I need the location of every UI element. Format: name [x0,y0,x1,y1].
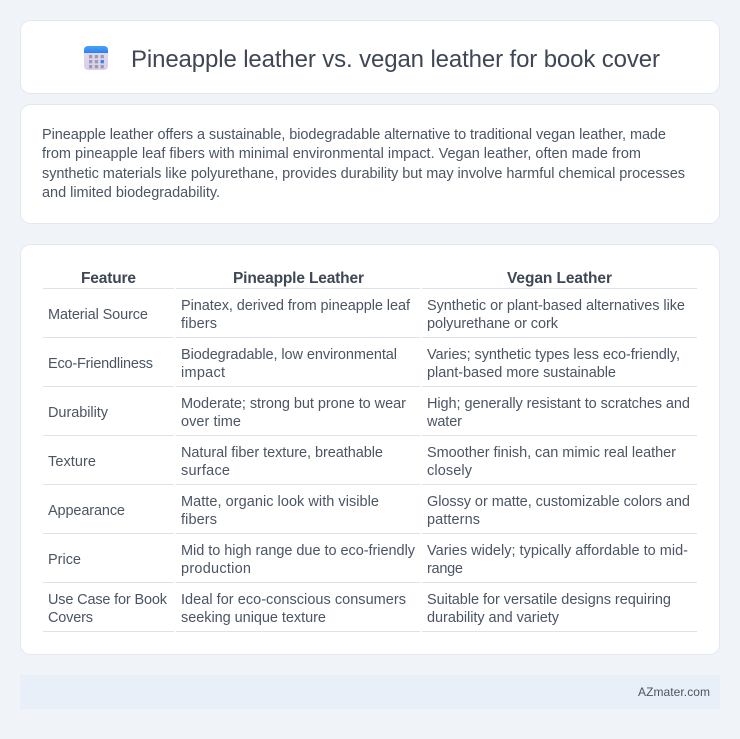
row: eco-friendliness: impact [181,365,225,381]
row: use case for book covers: Suitable for versatile designs requiring [427,592,671,608]
row: use case for book covers: Covers [48,610,93,626]
row: price: range [427,561,463,577]
row: material source: Material Source [48,307,148,323]
header panel [20,20,720,94]
row: eco-friendliness [43,347,697,386]
row: use case for book covers: seeking unique texture [181,610,326,626]
row: material source: Pinatex, derived from pineapple leaf [181,298,411,314]
title: Pineapple leather vs. vegan leather for book cover [131,46,660,73]
panel: intro [20,104,720,224]
footer credit: AZmater.com [638,685,710,699]
row: appearance [43,494,697,534]
row: texture [43,445,697,484]
row: appearance: Matte, organic look with visible [181,494,379,510]
row: material source: fibers [181,316,217,332]
row: use case for book covers: durability and variety [427,610,560,626]
row: durability: over time [181,414,241,430]
row: durability: Durability [48,405,109,421]
row: eco-friendliness: plant-based more sustainable [427,365,616,381]
row: texture: Smoother finish, can mimic real leather [427,445,676,461]
row: price: Varies widely; typically affordable to mid- [427,543,688,559]
row: eco-friendliness: Eco-Friendliness [48,356,153,372]
row: use case for book covers: Ideal for eco-conscious consumers [181,592,406,608]
row: durability: Moderate; strong but prone to wear [181,396,406,412]
row: eco-friendliness: Biodegradable, low environmental [181,347,397,363]
footer [20,675,720,709]
table header: Feature [81,270,136,287]
row: appearance: fibers [181,512,217,528]
intro text: synthetic materials like polyurethane, provides durability but may involve harmful chemical processes [42,166,685,182]
row: use case for book covers: Use Case for Book [48,592,168,608]
row: price [43,543,697,582]
row: price: production [181,561,251,577]
intro text: Pineapple leather offers a sustainable, biodegradable alternative to traditional vegan leather, made [42,127,666,143]
row: use case for book covers [43,592,697,632]
intro text: from pineapple leaf fibers with minimal environmental impact. Vegan leather, often made from [42,146,641,162]
icon: calendar [84,46,108,70]
row: price: Price [48,552,81,568]
row: texture: Natural fiber texture, breathable [181,445,383,461]
row: material source: polyurethane or cork [427,316,559,332]
intro text [42,127,685,201]
row: eco-friendliness: Varies; synthetic types less eco-friendly, [427,347,680,363]
row: durability: water [426,414,462,430]
row: price: Mid to high range due to eco-friendly [181,543,416,559]
table header: Pineapple Leather [233,270,364,287]
intro text: and limited biodegradability. [42,185,220,201]
row: durability: High; generally resistant to scratches and [427,396,690,412]
row: appearance: Appearance [48,503,125,519]
table header: Vegan Leather [507,270,612,287]
row: material source [43,298,697,338]
row: appearance: patterns [427,512,480,528]
table header [43,270,697,288]
row: appearance: Glossy or matte, customizable colors and [427,494,690,510]
row: material source: Synthetic or plant-based alternatives like [427,298,685,314]
row: durability [43,396,697,436]
row: texture: closely [427,463,473,479]
row: texture: Texture [48,454,96,470]
panel: comparison table [20,244,720,654]
row: texture: surface [181,463,230,479]
